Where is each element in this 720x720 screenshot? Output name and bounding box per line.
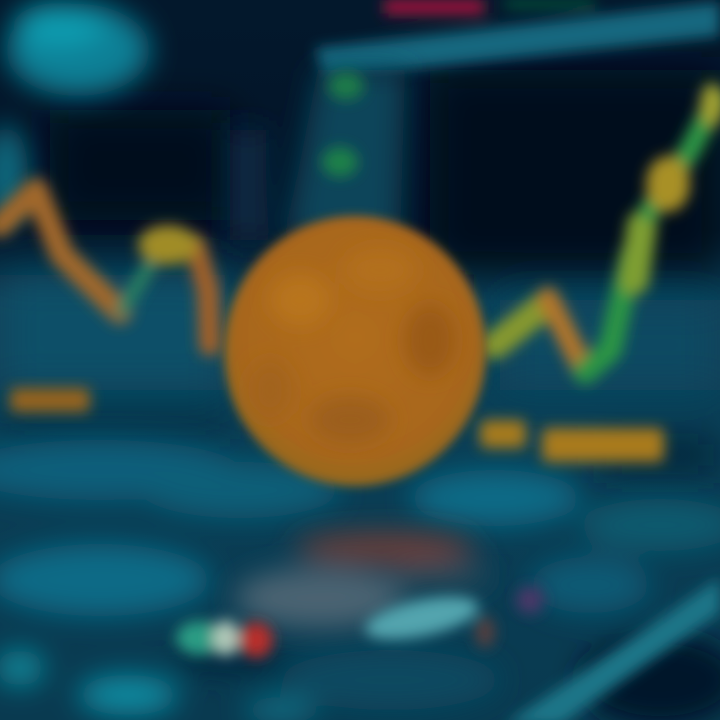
lower teal blobs — [0, 440, 720, 720]
right chart line — [495, 83, 720, 372]
left orange label — [10, 388, 90, 412]
left chart line — [0, 190, 210, 345]
right orange label — [480, 420, 664, 462]
keyboard panel — [235, 532, 490, 628]
colored highlights — [176, 586, 544, 658]
blob: top left teal — [0, 3, 150, 225]
green dots — [322, 72, 364, 177]
flask-like shape — [230, 70, 405, 240]
panel: dark chart background — [0, 70, 720, 470]
bottom diagonal edge — [505, 578, 720, 720]
icon: coin — [224, 216, 486, 486]
top bar — [315, 0, 720, 78]
coin mottling — [248, 248, 456, 444]
